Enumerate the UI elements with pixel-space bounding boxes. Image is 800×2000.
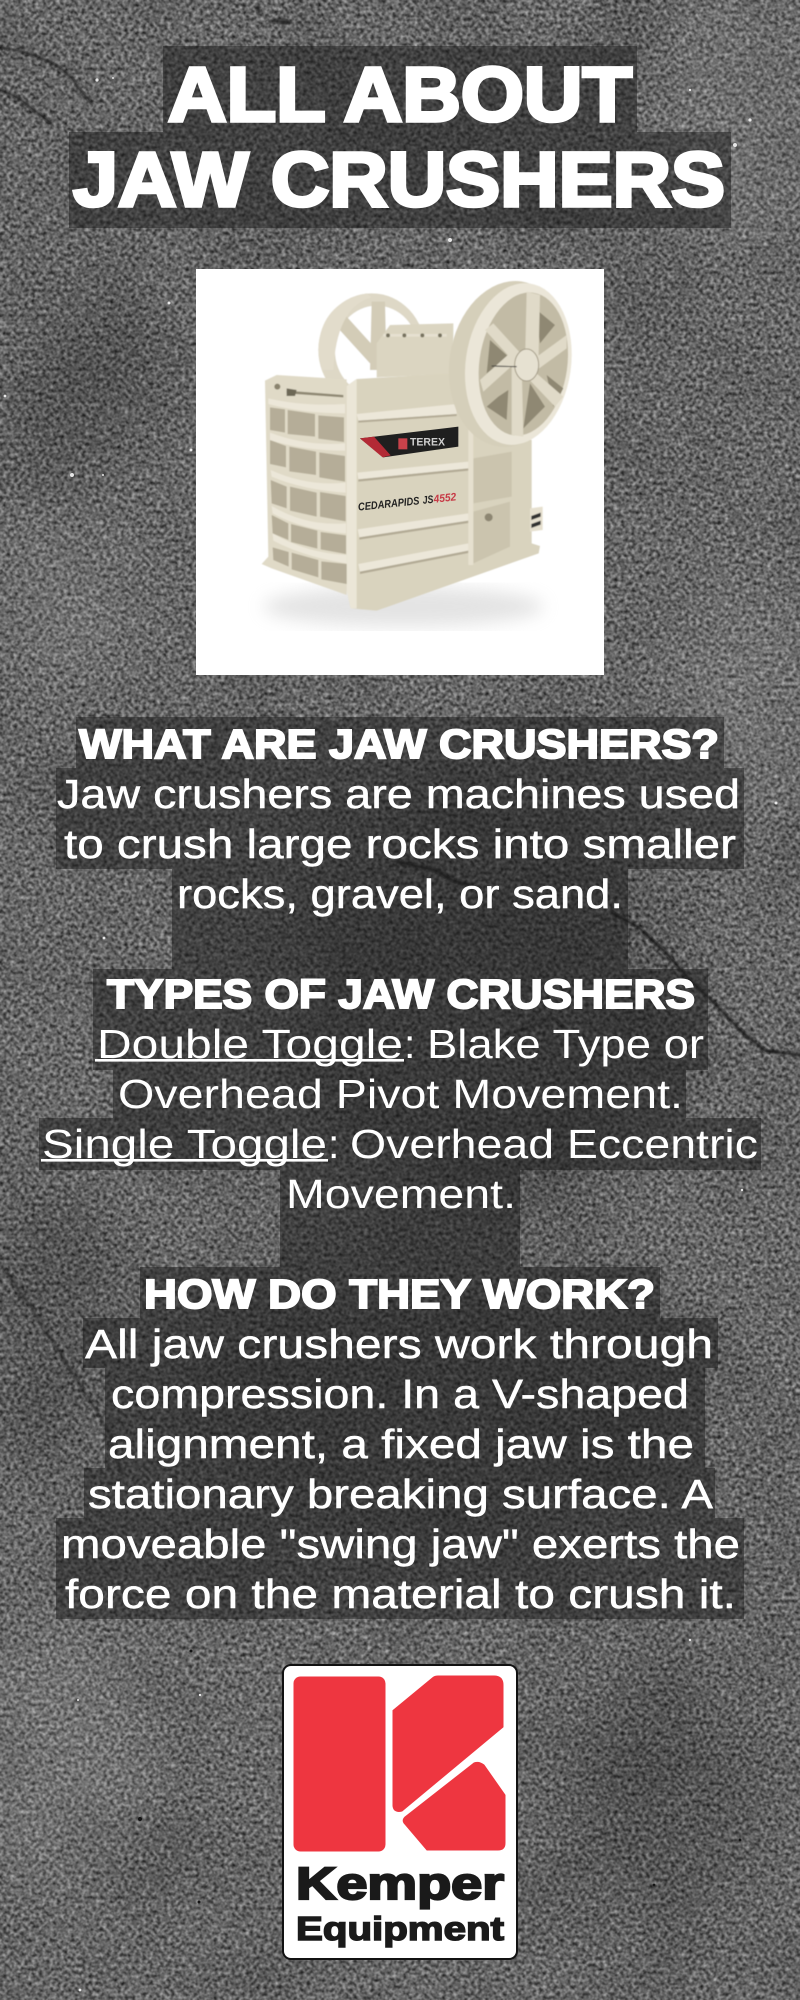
logo: Kemper Equipment xyxy=(283,1665,517,1959)
body: toggle types: : xyxy=(328,1121,339,1167)
body: toggle types xyxy=(41,1021,758,1217)
heading: what are jaw crushers: WHAT ARE JAW CRUSHERS? xyxy=(79,721,719,767)
section: types of jaw crushers xyxy=(39,969,761,1267)
body: definition: rocks, gravel, or sand. xyxy=(177,871,623,917)
back wheel xyxy=(318,293,425,407)
label: Terex: TEREX xyxy=(410,437,445,449)
title: ALL ABOUT xyxy=(168,52,632,138)
body: definition: to crush large rocks into smaller xyxy=(64,821,736,867)
body: definition xyxy=(57,771,740,917)
photo: jaw crusher machine xyxy=(196,269,604,675)
body: explanation: moveable "swing jaw" exerts the xyxy=(61,1521,740,1567)
section: how do they work xyxy=(56,1267,744,1619)
title xyxy=(69,46,731,228)
label: model: JS xyxy=(422,494,434,507)
body: definition: Jaw crushers are machines used xyxy=(57,771,740,817)
body: toggle types: : xyxy=(404,1021,415,1067)
body: toggle types: Movement. xyxy=(286,1171,516,1217)
label: model xyxy=(357,491,457,514)
body: explanation: All jaw crushers work through xyxy=(85,1321,713,1367)
body: toggle types: Double Toggle xyxy=(97,1021,403,1067)
body: explanation xyxy=(61,1321,740,1617)
label: model: CEDARAPIDS xyxy=(357,495,421,514)
top block xyxy=(377,323,453,377)
label: Terex xyxy=(360,427,458,457)
heading: types of jaw crushers: TYPES OF JAW CRUSHERS xyxy=(107,971,695,1017)
body: toggle types: Blake Type or xyxy=(427,1021,704,1067)
logo: Kemper Equipment: Equipment xyxy=(296,1910,504,1947)
body: explanation: force on the material to crush it. xyxy=(65,1571,736,1617)
front plate xyxy=(347,373,540,611)
body: explanation: compression. In a V-shaped xyxy=(111,1371,689,1417)
flywheel xyxy=(438,273,582,455)
body: toggle types: Single Toggle xyxy=(42,1121,327,1167)
ribs on front plate xyxy=(357,404,468,572)
logo: Kemper Equipment: Kemper xyxy=(296,1858,504,1909)
left grid frame xyxy=(262,375,347,595)
label: model: 4552 xyxy=(432,491,457,506)
heading: how do they work: HOW DO THEY WORK? xyxy=(144,1271,655,1317)
section: what are jaw crushers xyxy=(56,717,744,969)
body: toggle types: Overhead Pivot Movement. xyxy=(118,1071,683,1117)
title: JAW CRUSHERS xyxy=(73,137,725,223)
body: toggle types: Overhead Eccentric xyxy=(350,1121,758,1167)
body: explanation: alignment, a fixed jaw is the xyxy=(108,1421,694,1467)
body: explanation: stationary breaking surface. A xyxy=(88,1471,714,1517)
